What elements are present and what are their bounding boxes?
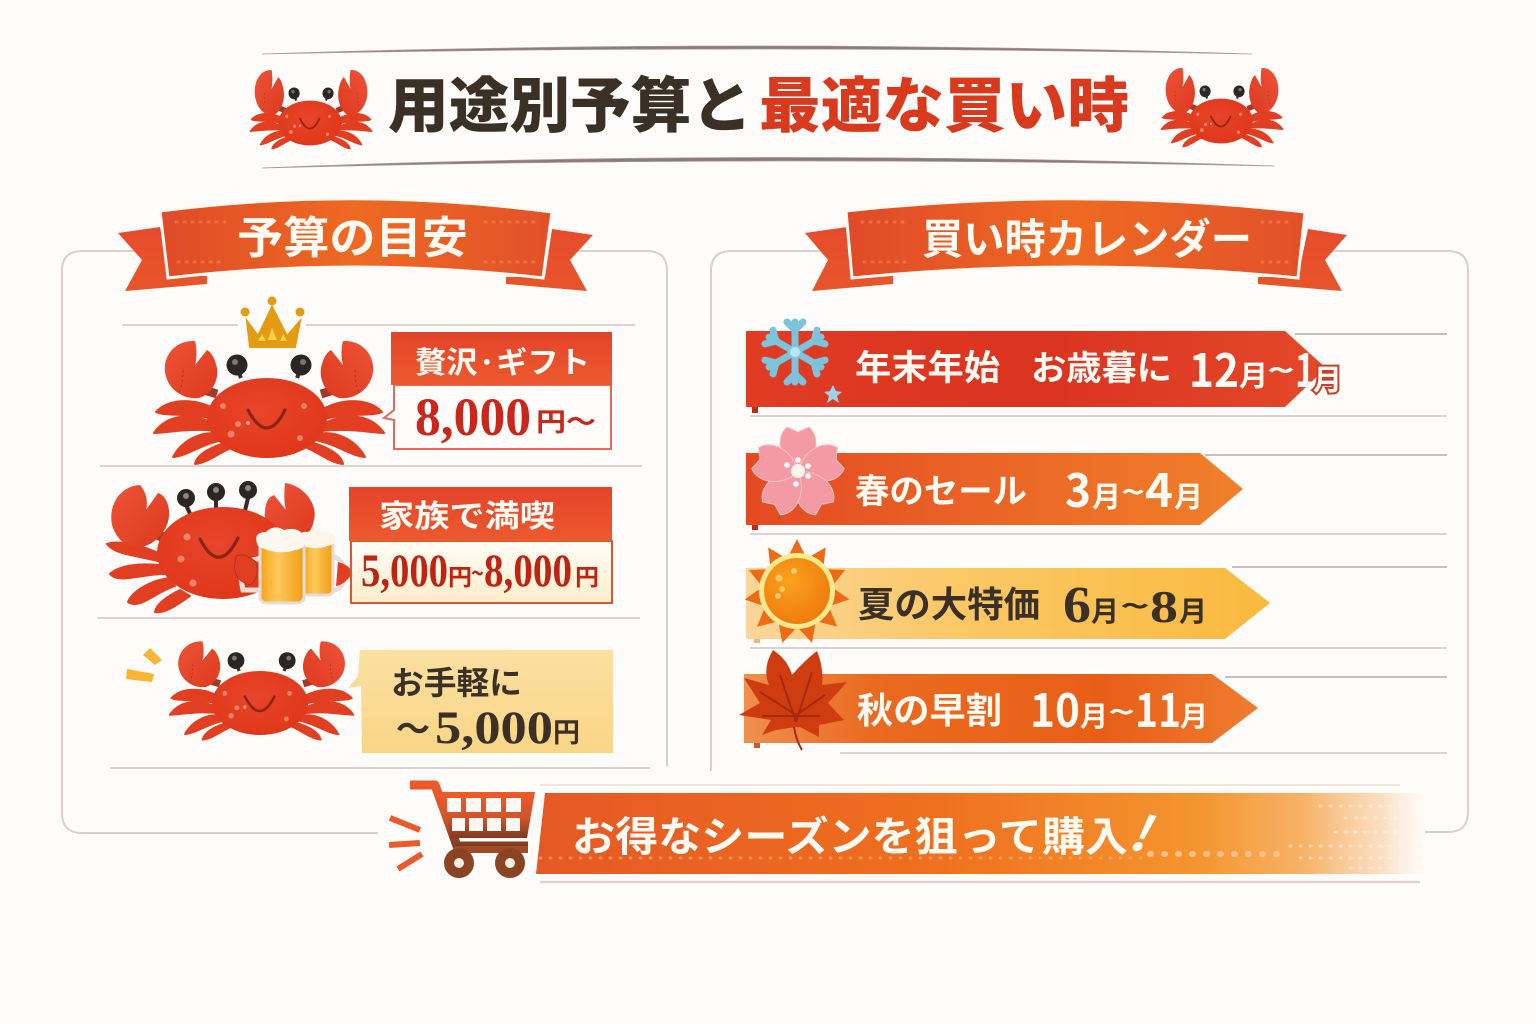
icon: small star	[824, 385, 842, 403]
period: 月	[1239, 353, 1268, 395]
price: 5,000	[361, 545, 448, 597]
callout: luxury	[384, 332, 612, 449]
callout: casual	[348, 650, 613, 754]
period: 10	[1030, 675, 1080, 741]
arrow: summer	[743, 539, 1270, 645]
period: ~	[1120, 582, 1150, 626]
callout: casual: 円	[553, 711, 580, 750]
heading text: 買い時カレンダー	[922, 206, 1252, 267]
period	[1189, 335, 1342, 401]
icon: sparkle marks	[126, 648, 162, 682]
exclamation: !	[1124, 793, 1161, 868]
period: ~	[1121, 468, 1145, 512]
period: 12	[1189, 335, 1239, 401]
panel: budget outline	[62, 251, 667, 833]
icon: maple leaf	[739, 650, 847, 750]
period	[1065, 455, 1203, 521]
label: 春のセール	[855, 464, 1027, 513]
label text: お手軽に	[391, 658, 522, 704]
period: 11	[1135, 675, 1181, 741]
icon: motion lines	[389, 818, 422, 869]
period: 6	[1063, 577, 1091, 634]
icon: crab luxury	[154, 341, 384, 464]
price: ~	[471, 554, 484, 589]
label: 秋の早割	[857, 682, 1002, 734]
price: 8,000	[415, 387, 531, 447]
icon: crab with beer	[107, 481, 352, 612]
panel: calendar outline	[711, 251, 1468, 832]
callout: casual: 5,000	[435, 702, 553, 754]
heading text: 予算の目安	[237, 202, 468, 266]
arrow: autumn	[739, 650, 1258, 750]
call to action band	[536, 785, 1430, 882]
icon: cherry blossom	[750, 427, 846, 519]
period: 1	[1295, 335, 1315, 401]
label: 年末年始	[855, 340, 1000, 391]
period: 月	[1174, 474, 1203, 516]
period: ~	[1267, 346, 1295, 392]
period: ~	[1108, 688, 1135, 732]
title text dark: 用途別予算と	[388, 58, 752, 145]
period: 3	[1065, 455, 1091, 521]
period: 月	[1092, 474, 1121, 516]
beer mugs	[235, 527, 352, 603]
call to action text: お得なシーズンを狙って購入	[572, 803, 1128, 863]
icon: title crab right	[1161, 68, 1283, 147]
label text: 家族で満喫	[379, 491, 555, 536]
period: 月	[1091, 590, 1119, 630]
price unit: 円～	[536, 402, 596, 439]
heading ribbon: budget	[118, 199, 593, 291]
icon: snowflake	[765, 322, 825, 382]
price: 円	[448, 558, 472, 592]
period	[1063, 577, 1207, 634]
period: 4	[1145, 455, 1173, 521]
icon: title crab left	[250, 70, 372, 149]
icon: crab casual	[170, 641, 354, 740]
period: 8	[1150, 581, 1178, 632]
callout: family	[349, 487, 612, 603]
icon: shopping cart	[389, 785, 535, 873]
label: 夏の大特価	[858, 576, 1040, 628]
arrow: spring	[746, 427, 1243, 530]
price: 8,000	[484, 545, 572, 597]
period: 月	[1080, 695, 1108, 735]
period: 月	[1313, 357, 1342, 399]
icon: crown	[240, 296, 304, 347]
title banner	[250, 46, 1283, 168]
price: ～	[396, 702, 430, 751]
arrow: winter	[746, 322, 1342, 413]
label text: 贅沢·ギフト	[415, 338, 590, 382]
heading ribbon: calendar	[805, 199, 1347, 291]
price: 円	[575, 558, 599, 592]
period: 月	[1179, 590, 1207, 630]
title text red: 最適な買い時	[759, 58, 1129, 145]
label: お歳暮に	[1031, 341, 1172, 390]
price	[361, 545, 599, 597]
period: 月	[1180, 695, 1208, 735]
icon: sun	[743, 539, 851, 645]
period	[1030, 675, 1208, 741]
